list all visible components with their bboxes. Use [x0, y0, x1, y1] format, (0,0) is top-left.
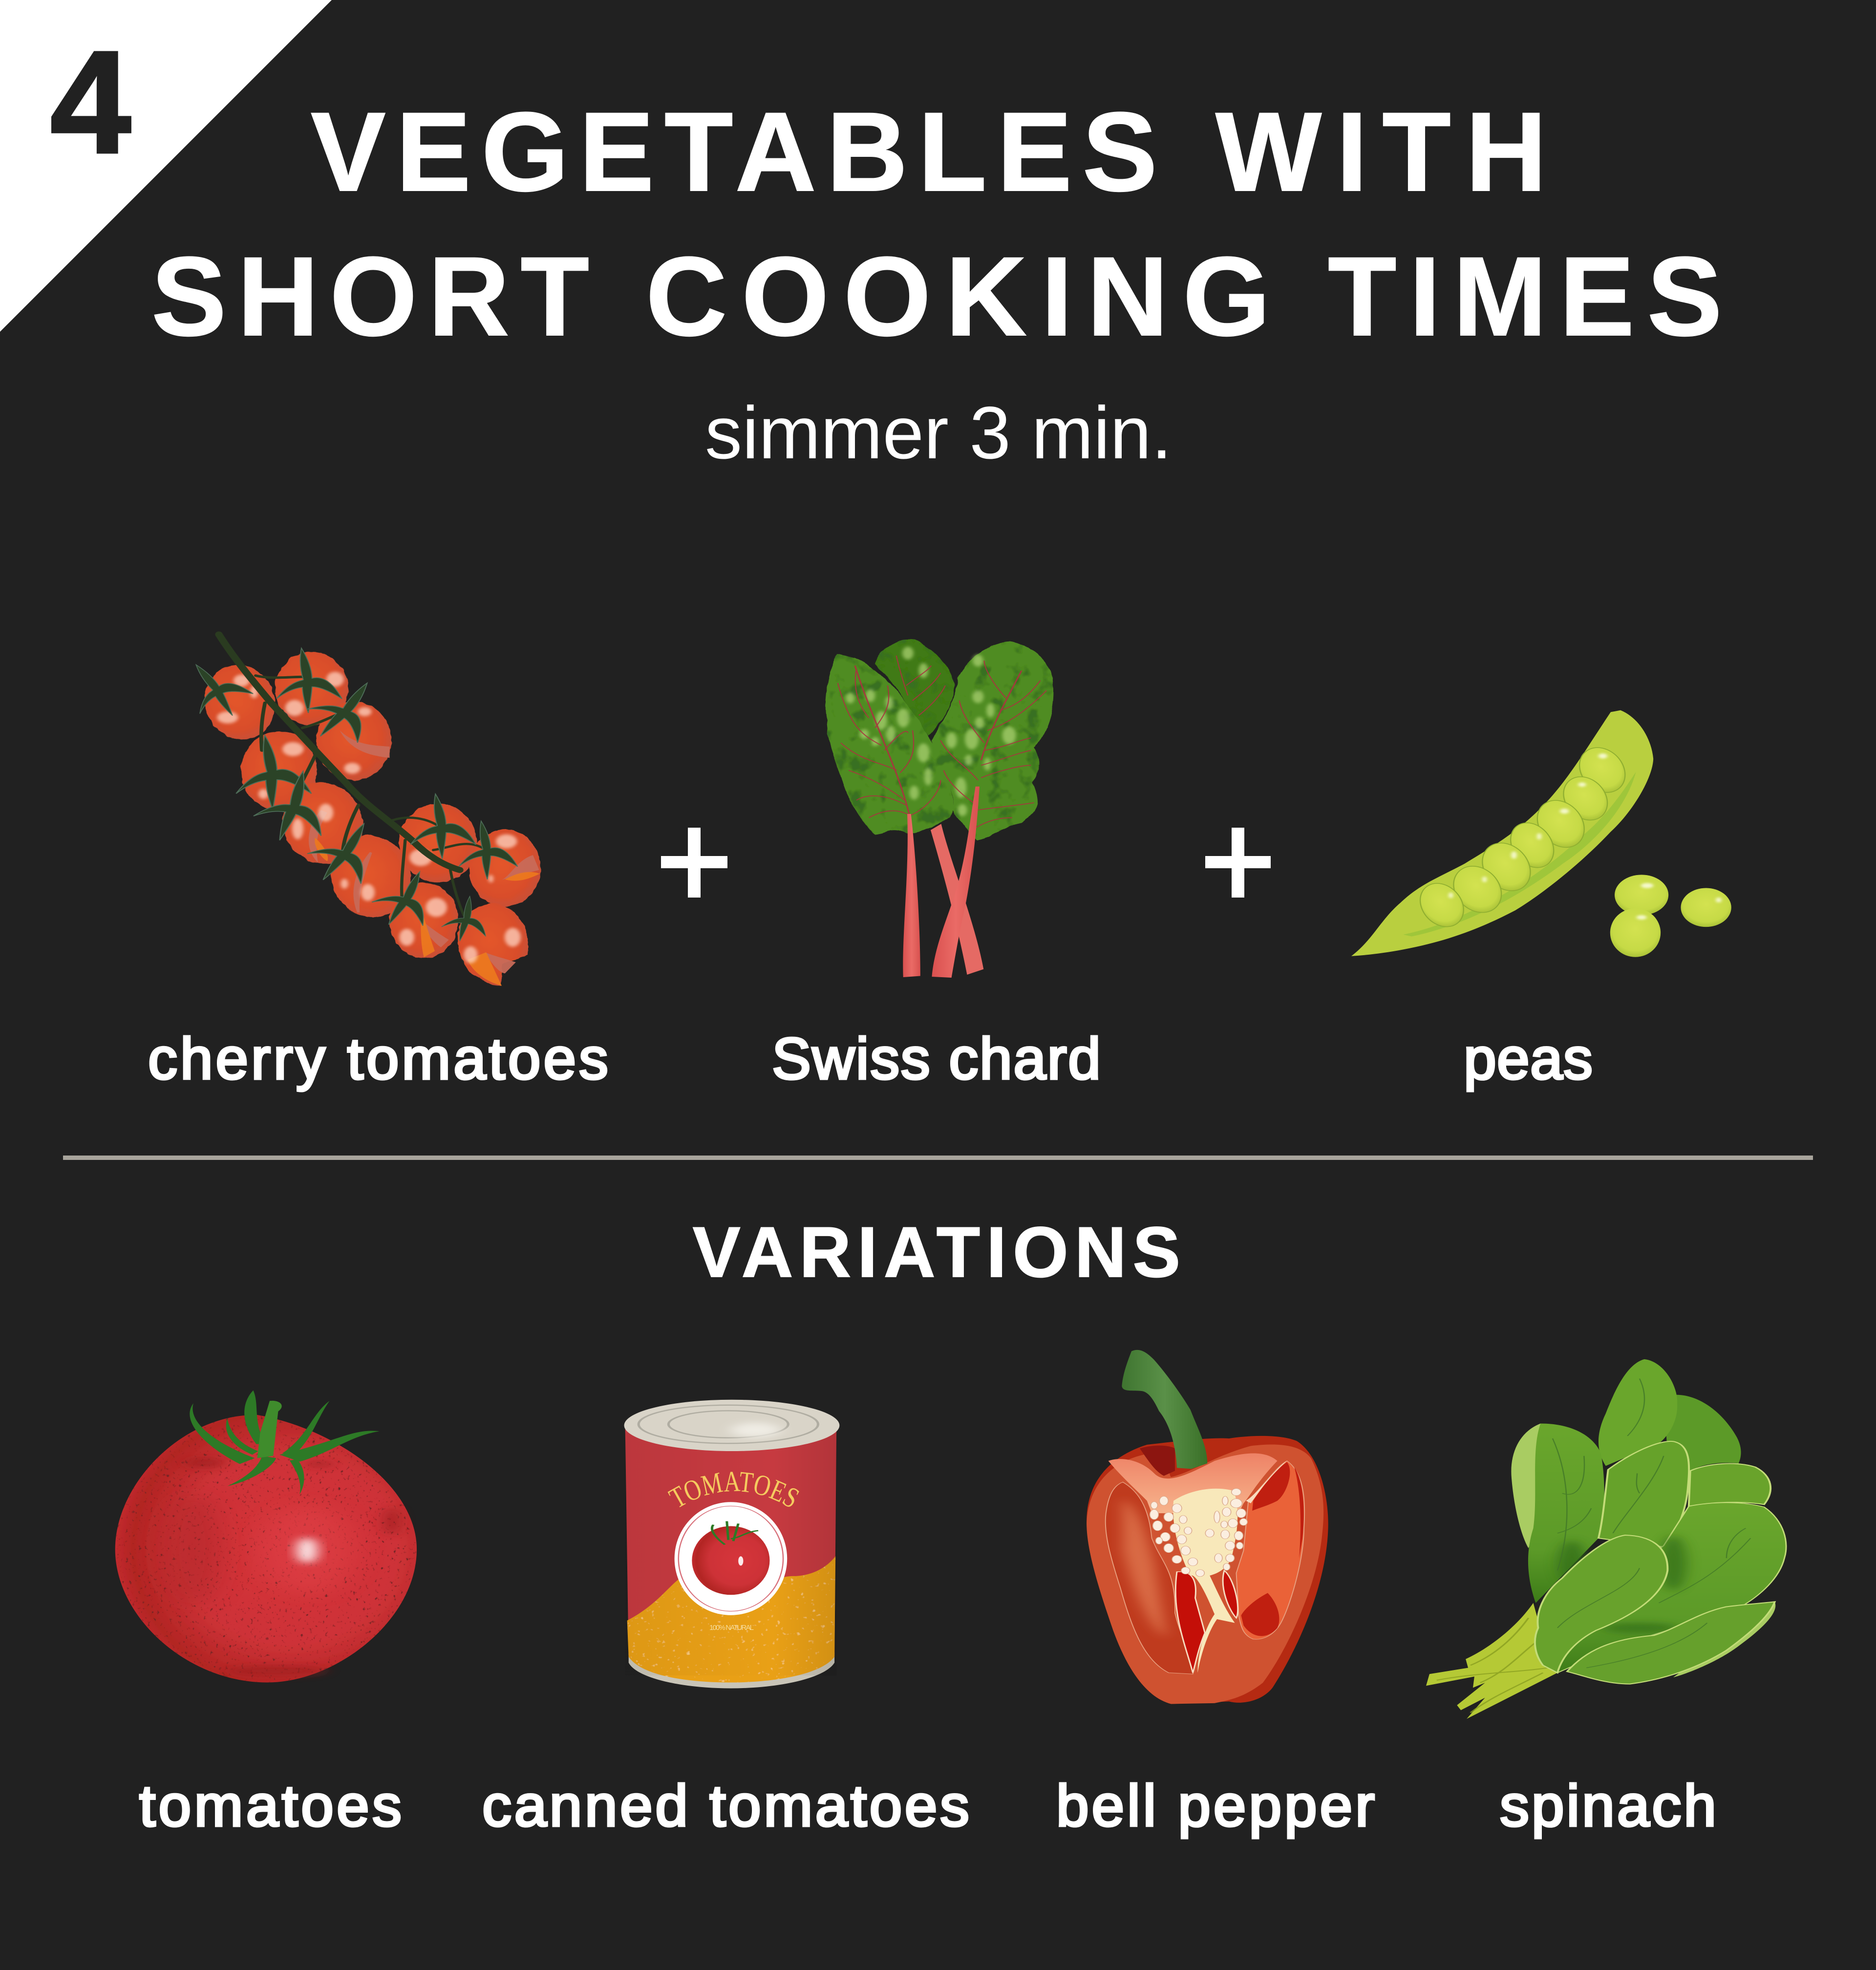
right small leaf — [1689, 1464, 1770, 1506]
icon: plus sign — [1205, 828, 1271, 898]
icon: spinach — [1426, 1359, 1786, 1719]
right cavity dark red — [1241, 1462, 1304, 1636]
icon: canned tomatoes: TOMATOES — [667, 1472, 799, 1507]
peas in pod — [1414, 745, 1632, 930]
red veins — [838, 656, 1046, 830]
dark stem notch — [1140, 1446, 1175, 1476]
skin splits — [309, 730, 539, 973]
label: canned tomatoes: canned tomatoes — [482, 1773, 969, 1839]
front centre leaf — [1535, 1535, 1667, 1673]
sepals — [277, 648, 342, 713]
can small print: 100% NATURAL — [709, 1624, 754, 1632]
yellow label band — [627, 1556, 835, 1683]
icon: plus sign — [661, 828, 727, 898]
peach pith — [1109, 1453, 1278, 1513]
back right leaf — [1663, 1395, 1741, 1472]
green stem — [1122, 1350, 1207, 1469]
can body red — [625, 1425, 836, 1683]
title: COOKING — [646, 234, 1270, 359]
label: tomatoes: tomatoes — [139, 1773, 402, 1839]
back wall — [1087, 1436, 1328, 1704]
glossy highlights — [217, 672, 521, 963]
loose peas — [1610, 875, 1731, 957]
stem lines — [1437, 1618, 1548, 1713]
icon: cherry tomatoes — [176, 634, 541, 986]
label: peas: peas — [1464, 1026, 1593, 1092]
mid leaf — [1599, 1441, 1689, 1547]
red slots — [1175, 1572, 1205, 1673]
big right leaf — [1543, 1503, 1786, 1673]
shoulder shading — [185, 1457, 401, 1676]
top leaf — [1599, 1359, 1677, 1466]
leaves — [825, 640, 1053, 840]
icon: bell pepper — [1087, 1350, 1328, 1704]
centre core — [1173, 1489, 1237, 1673]
tomato fruits — [200, 652, 541, 986]
badge number: 4 — [50, 21, 132, 184]
calyx — [190, 1391, 380, 1495]
can base rim — [629, 1652, 834, 1688]
stems bundle — [1426, 1603, 1557, 1719]
pale highlights — [846, 646, 1016, 816]
mini calyx — [712, 1521, 758, 1544]
seeds — [1150, 1489, 1247, 1577]
leaf veins — [1553, 1379, 1750, 1668]
title: WITH — [1215, 89, 1547, 214]
vine stem — [219, 634, 486, 920]
left cavity — [1106, 1482, 1193, 1674]
label: Swiss chard: Swiss chard — [772, 1026, 1101, 1092]
lid — [624, 1400, 839, 1451]
pea highlights — [1449, 753, 1722, 920]
label: cherry tomatoes: cherry tomatoes — [148, 1026, 608, 1092]
label: bell pepper: bell pepper — [1056, 1773, 1375, 1839]
highlight — [265, 1505, 355, 1594]
title: TIMES — [1328, 234, 1722, 359]
corner badge — [0, 0, 332, 332]
left body shade — [163, 1493, 222, 1606]
tomato body — [115, 1415, 417, 1683]
can lettering — [674, 1491, 794, 1511]
orange accents — [315, 837, 540, 986]
can shading — [625, 1433, 836, 1675]
back stalk — [931, 824, 983, 975]
icon: peas — [1351, 710, 1731, 957]
cut flesh — [1087, 1445, 1323, 1704]
white corner triangle — [0, 0, 332, 332]
left pale underside — [1511, 1423, 1543, 1548]
icon: Swiss chard — [825, 640, 1053, 978]
left leaf — [1528, 1423, 1604, 1603]
label: spinach: spinach — [1500, 1773, 1716, 1839]
icon: tomato — [115, 1391, 417, 1683]
icon: canned tomatoes — [624, 1399, 839, 1689]
title: VEGETABLES — [311, 89, 1157, 214]
pod inner shade — [1403, 772, 1636, 937]
front stalks — [903, 814, 920, 977]
round white label — [675, 1502, 787, 1615]
leaf base shadows — [1557, 1536, 1687, 1633]
title — [151, 89, 1722, 359]
mini tomato — [692, 1526, 769, 1595]
title: SHORT — [151, 234, 589, 359]
bottom right leaf — [1673, 1602, 1775, 1677]
variations heading: VARIATIONS — [693, 1212, 1180, 1292]
right cavity — [1236, 1461, 1304, 1639]
open pod — [1351, 710, 1653, 956]
subtitle: simmer 3 min. — [705, 391, 1172, 474]
